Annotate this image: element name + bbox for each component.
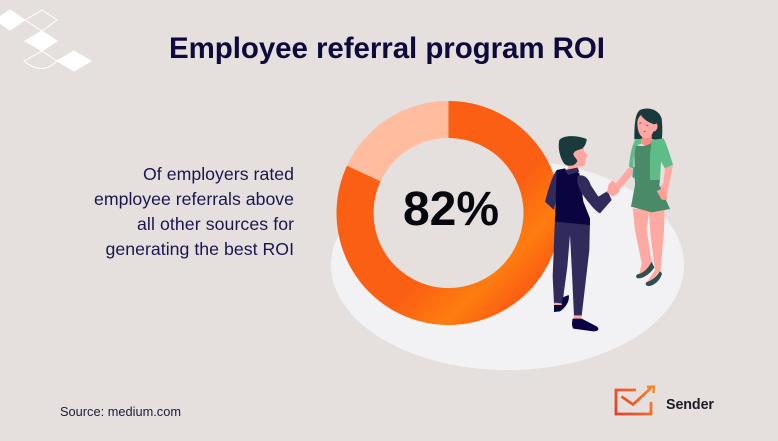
donut segment: 82% <box>355 120 542 306</box>
facial features <box>639 123 648 132</box>
upper body <box>545 136 612 225</box>
backdrop ellipse <box>331 160 684 370</box>
donut segment: remaining 18% <box>364 119 448 173</box>
illustration: handshake <box>545 108 673 331</box>
donut value: 82% <box>403 183 499 236</box>
left arm <box>614 167 636 189</box>
description text: generating the best ROI <box>106 239 294 259</box>
description text <box>94 164 294 259</box>
jacket right <box>650 138 673 180</box>
donut hole <box>372 137 524 289</box>
legs <box>553 217 590 316</box>
man <box>545 136 612 331</box>
under layer <box>632 167 637 179</box>
sender logo <box>616 386 714 414</box>
hair <box>634 108 662 141</box>
hand on hip shading <box>657 188 667 200</box>
clasped hands <box>607 180 620 197</box>
description text: all other sources for <box>137 214 294 234</box>
source note: Source: medium.com <box>60 404 181 419</box>
face <box>637 115 658 138</box>
jacket left <box>629 138 642 169</box>
logo wordmark: Sender <box>666 397 714 413</box>
donut chart <box>355 119 542 306</box>
dress <box>631 143 670 212</box>
vest <box>555 168 590 225</box>
upper body <box>614 115 673 212</box>
shoes <box>636 262 662 286</box>
neck <box>642 135 652 146</box>
decorative diamonds <box>0 10 91 71</box>
icon: envelope with arrow <box>616 386 654 414</box>
description text: Of employers rated <box>143 164 294 184</box>
title: Employee referral program ROI <box>169 32 605 65</box>
description text: employee referrals above <box>94 189 294 209</box>
legs <box>633 208 665 282</box>
shoes and ankles <box>554 295 598 331</box>
right arm <box>657 166 673 200</box>
collar <box>565 168 579 175</box>
woman <box>614 108 673 286</box>
hair <box>559 136 587 166</box>
face and neck <box>567 144 588 171</box>
far arm <box>545 170 560 210</box>
near arm <box>577 175 612 213</box>
